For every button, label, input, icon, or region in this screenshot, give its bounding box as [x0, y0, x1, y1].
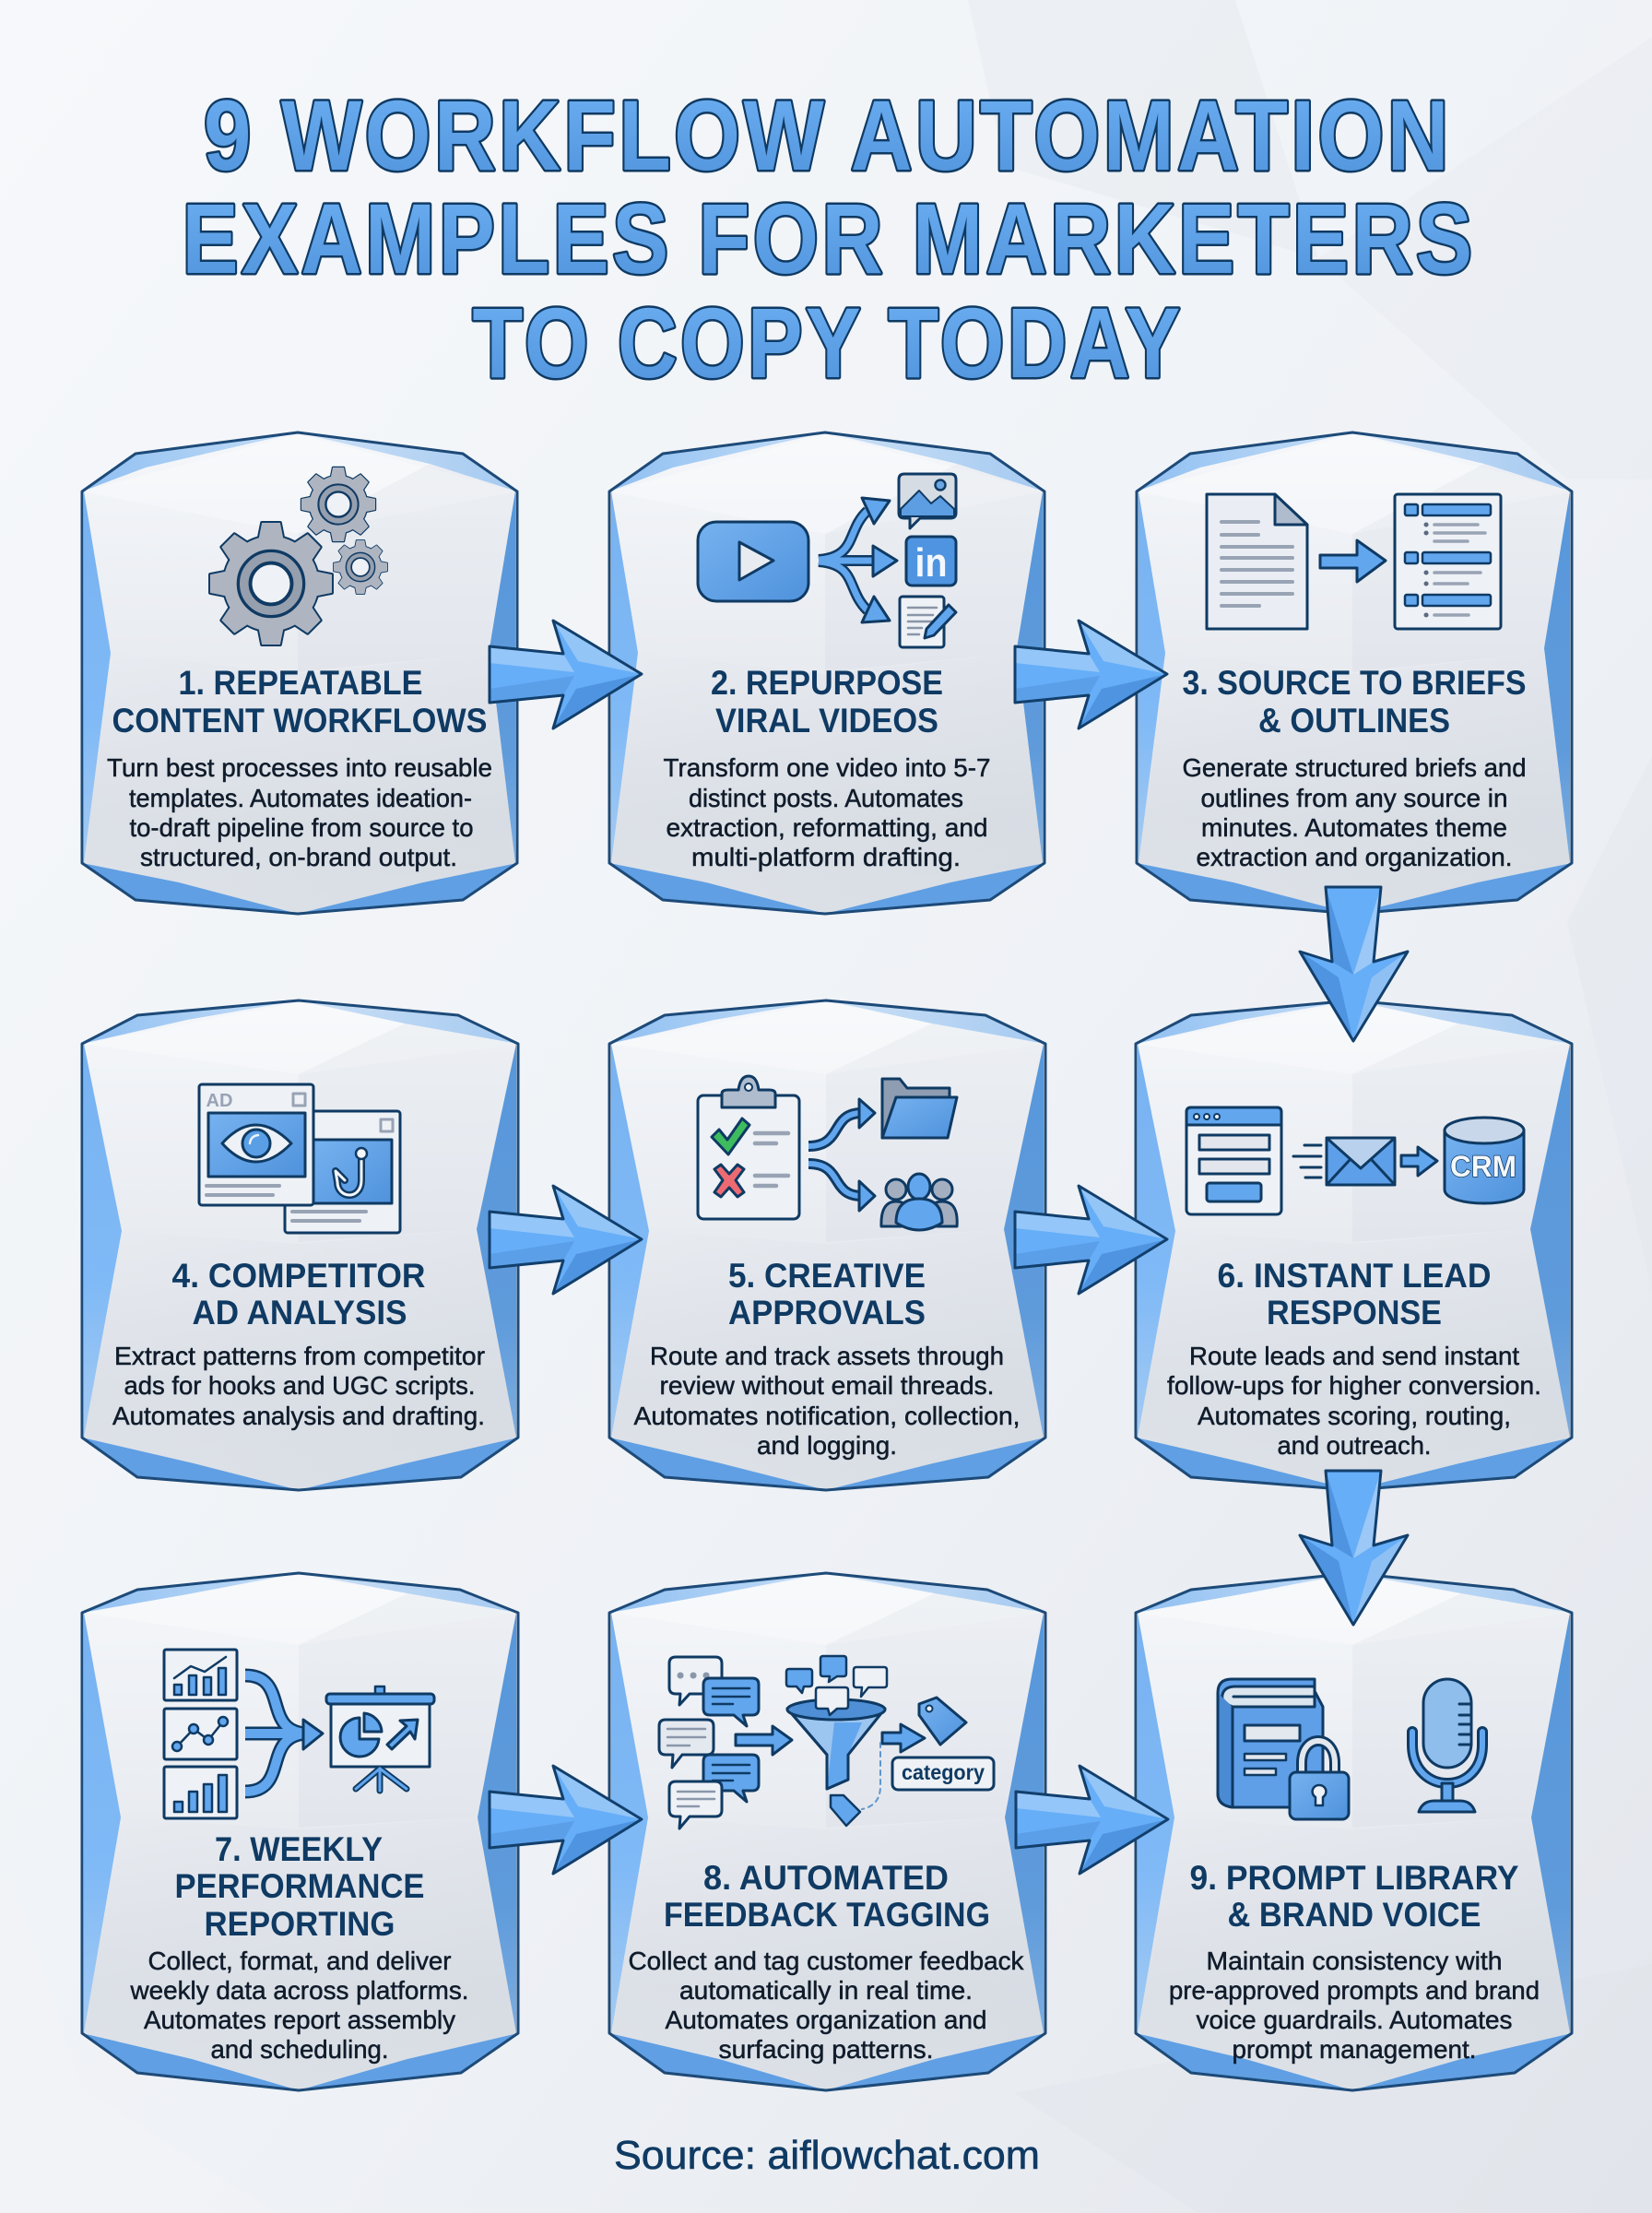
icon: document to outline — [1207, 494, 1501, 629]
card 3 text: extraction and organization. — [1197, 843, 1512, 871]
card 8 text: surfacing patterns. — [719, 2035, 933, 2064]
card 2 text — [664, 753, 990, 871]
card 7 text: weekly data across platforms. — [130, 1976, 468, 2005]
title: TO COPY TODAY — [472, 287, 1184, 398]
card 1 heading: CONTENT WORKFLOWS — [112, 702, 487, 740]
card 9 heading: & BRAND VOICE — [1228, 1896, 1481, 1934]
card 7 heading: REPORTING — [205, 1905, 395, 1943]
card 9 heading: 9. PROMPT LIBRARY — [1189, 1859, 1519, 1897]
card 4 text: ads for hooks and UGC scripts. — [124, 1371, 476, 1400]
card 5 heading: 5. CREATIVE — [728, 1257, 926, 1295]
card 6 heading: RESPONSE — [1267, 1294, 1442, 1331]
card 8 text — [629, 1947, 1024, 2064]
card 3 background — [1137, 432, 1572, 914]
card 4 text: Extract patterns from competitor — [114, 1342, 485, 1370]
card 5 text — [634, 1342, 1020, 1460]
card 8 text: automatically in real time. — [679, 1976, 973, 2005]
card 3 text — [1182, 753, 1527, 871]
panel: card 9 — [1136, 1573, 1572, 2090]
card 8 background — [609, 1573, 1045, 2090]
card 6 text: Route leads and send instant — [1189, 1342, 1519, 1370]
card 2 text: multi-platform drafting. — [691, 843, 961, 871]
card 5 text: and logging. — [757, 1431, 897, 1460]
card 7 text: and scheduling. — [210, 2035, 389, 2064]
card 2 text: distinct posts. Automates — [689, 784, 963, 812]
card 1 heading: 1. REPEATABLE — [179, 664, 422, 702]
title: 9 WORKFLOW AUTOMATION — [204, 79, 1452, 191]
arrow: card 4 to 5 — [490, 1186, 642, 1294]
icon: video to multi-platform: in — [914, 540, 948, 586]
arrow: card 6 to 9 — [1300, 1471, 1408, 1625]
card 3 text: outlines from any source in — [1200, 784, 1508, 812]
card 8 text: Collect and tag customer feedback — [629, 1947, 1024, 1975]
card 4 heading: 4. COMPETITOR — [171, 1257, 426, 1295]
card 5 text: Route and track assets through — [650, 1342, 1004, 1370]
card 3 text: Generate structured briefs and — [1182, 753, 1527, 782]
card 3 heading: & OUTLINES — [1258, 702, 1450, 740]
card 2 background — [609, 432, 1044, 914]
title — [183, 79, 1475, 398]
card 1 text — [107, 753, 492, 871]
card 5 heading — [728, 1257, 926, 1331]
card 7 text: Automates report assembly — [144, 2006, 455, 2034]
panel: card 1 — [82, 432, 517, 914]
card 7 heading: PERFORMANCE — [175, 1867, 424, 1905]
card 7 background — [82, 1573, 518, 2090]
card 9 heading — [1189, 1859, 1519, 1934]
panel: card 5 — [609, 1000, 1045, 1490]
card 6 heading — [1217, 1257, 1492, 1331]
panel: card 6 — [1136, 1000, 1572, 1490]
card 8 heading: FEEDBACK TAGGING — [664, 1896, 990, 1934]
card 7 heading — [175, 1830, 424, 1943]
card 2 text: Transform one video into 5-7 — [664, 753, 990, 782]
icon: ad analysis — [199, 1084, 400, 1233]
card 6 text: follow-ups for higher conversion. — [1167, 1371, 1541, 1400]
card 6 text: and outreach. — [1278, 1431, 1431, 1460]
icon: feedback tagging: category — [902, 1760, 985, 1784]
icon: approvals — [698, 1076, 957, 1230]
card 5 heading: APPROVALS — [728, 1294, 926, 1331]
card 2 heading — [711, 664, 943, 740]
arrow: card 7 to 8 — [490, 1766, 642, 1874]
card 4 background — [82, 1000, 518, 1490]
card 6 text — [1167, 1342, 1541, 1460]
card 7 heading: 7. WEEKLY — [215, 1830, 383, 1868]
card 9 text: pre-approved prompts and brand — [1169, 1976, 1540, 2005]
card 4 heading — [171, 1257, 426, 1331]
card 5 background — [609, 1000, 1045, 1490]
arrow: card 3 to 6 — [1300, 887, 1408, 1041]
card 4 text — [112, 1342, 485, 1430]
card 9 text: prompt management. — [1232, 2035, 1477, 2064]
card 1 background — [82, 432, 517, 914]
card 1 text: Turn best processes into reusable — [107, 753, 492, 782]
panel: card 2 — [609, 432, 1044, 914]
source line: Source: aiflowchat.com — [614, 2133, 1040, 2178]
icon: ad analysis: AD — [206, 1091, 232, 1111]
card 2 text: extraction, reformatting, and — [666, 813, 988, 842]
card 1 text: to-draft pipeline from source to — [129, 813, 474, 842]
title: TO COPY TODAY — [472, 287, 1184, 398]
icon: gears — [210, 467, 387, 645]
card 6 heading: 6. INSTANT LEAD — [1217, 1257, 1492, 1295]
panel: card 4 — [82, 1000, 518, 1490]
card 1 text: templates. Automates ideation- — [129, 784, 472, 812]
card 4 text: Automates analysis and drafting. — [112, 1402, 485, 1430]
card 9 background — [1136, 1573, 1572, 2090]
card 2 heading: 2. REPURPOSE — [711, 664, 943, 702]
card 5 text: review without email threads. — [660, 1371, 994, 1400]
card 1 heading — [112, 664, 487, 740]
card 3 text: minutes. Automates theme — [1201, 813, 1507, 842]
icon: lead response — [1186, 1107, 1524, 1214]
icon: weekly reports — [164, 1650, 434, 1818]
panel: card 8 — [609, 1573, 1045, 2090]
icon: prompt library and microphone — [1218, 1679, 1482, 1819]
icon: lead response: CRM — [1450, 1150, 1516, 1183]
panel: card 7 — [82, 1573, 518, 2090]
icon: video to multi-platform — [698, 474, 956, 647]
card 5 text: Automates notification, collection, — [634, 1402, 1020, 1430]
card 4 heading: AD ANALYSIS — [192, 1294, 407, 1331]
card 9 text: Maintain consistency with — [1206, 1947, 1503, 1975]
card 3 heading: 3. SOURCE TO BRIEFS — [1182, 664, 1527, 702]
card 7 text: Collect, format, and deliver — [148, 1947, 452, 1975]
card 8 text: Automates organization and — [666, 2006, 986, 2034]
card 6 text: Automates scoring, routing, — [1198, 1402, 1511, 1430]
arrow: card 5 to 6 — [1015, 1186, 1167, 1294]
card 7 text — [130, 1947, 468, 2064]
icon: feedback tagging — [659, 1656, 994, 1828]
card 8 heading — [664, 1859, 990, 1934]
card 2 heading: VIRAL VIDEOS — [715, 702, 938, 740]
card 3 heading — [1182, 664, 1527, 740]
arrow: card 2 to 3 — [1015, 621, 1167, 728]
card 8 heading: 8. AUTOMATED — [703, 1859, 949, 1897]
card 6 background — [1136, 1000, 1572, 1490]
card 9 text: voice guardrails. Automates — [1197, 2006, 1512, 2034]
card 1 text: structured, on-brand output. — [140, 843, 457, 871]
card 9 text — [1169, 1947, 1540, 2064]
title: 9 WORKFLOW AUTOMATION — [204, 79, 1452, 191]
arrow: card 8 to 9 — [1016, 1766, 1168, 1874]
arrow: card 1 to 2 — [490, 621, 642, 728]
panel: card 3 — [1137, 432, 1572, 914]
